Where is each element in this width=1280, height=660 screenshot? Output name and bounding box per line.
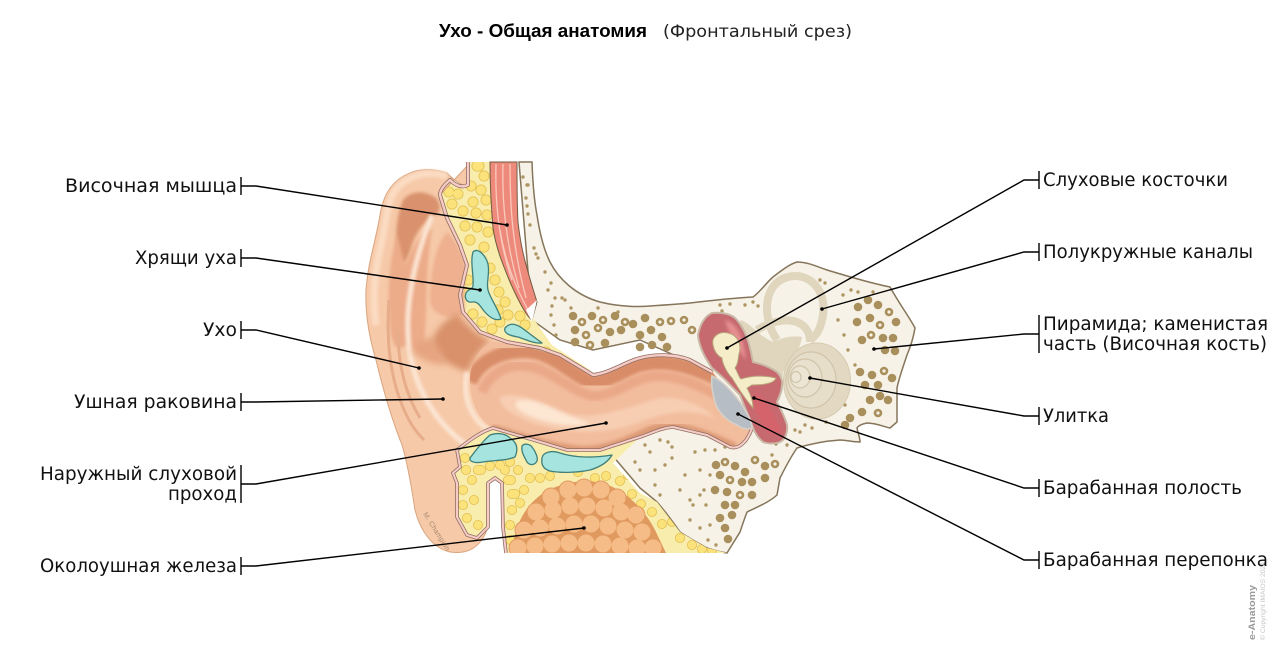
label: cochlea: Улитка <box>1043 406 1109 427</box>
label: semicircular canals: Полукружные каналы <box>1043 242 1253 263</box>
ear cartilage <box>465 251 612 472</box>
label: ear <box>203 320 421 370</box>
label: auricle <box>74 392 445 413</box>
label: ear cartilage <box>135 248 482 292</box>
label: auditory ossicles <box>725 170 1228 350</box>
skin membrane lower <box>453 427 752 553</box>
label: auditory ossicles: Слуховые косточки <box>1043 170 1228 191</box>
fat lower <box>453 428 727 553</box>
label: ear cartilage: Хрящи уха <box>135 248 237 269</box>
label: parotid gland <box>40 526 586 577</box>
label: petrous part <box>872 314 1268 355</box>
label: external auditory canal <box>40 421 608 505</box>
label: parotid gland: Околоушная железа <box>40 556 237 577</box>
skin membrane upper <box>440 162 712 375</box>
label: semicircular canals <box>820 242 1253 311</box>
scapha and antihelix folds <box>396 192 440 263</box>
label: petrous part: часть (Височная кость) <box>1043 334 1267 355</box>
label: tympanic membrane <box>736 412 1268 571</box>
temporal muscle <box>490 162 537 320</box>
title <box>439 20 852 42</box>
inner ear: vestibule and semicircular canals <box>740 276 824 400</box>
watermark: © Copyright IMAIOS 2024 <box>1259 562 1267 640</box>
left labels <box>40 176 608 577</box>
ear anatomy illustration <box>366 162 915 553</box>
label: cochlea <box>808 376 1109 427</box>
concha <box>430 232 466 317</box>
label: tympanic cavity: Барабанная полость <box>1043 478 1242 499</box>
label: temporal muscle: Височная мышца <box>65 176 237 197</box>
cochlea <box>784 343 850 419</box>
label: temporal muscle <box>65 176 509 227</box>
helix <box>374 174 447 325</box>
label: external auditory canal: Наружный слуховой <box>40 464 237 485</box>
right labels <box>725 170 1268 571</box>
watermark: e-Anatomy <box>1247 585 1257 640</box>
parotid gland <box>512 481 666 553</box>
fat upper <box>440 162 593 372</box>
label: auricle: Ушная раковина <box>74 392 237 413</box>
tympanic membrane <box>712 376 752 429</box>
watermark <box>1247 562 1267 640</box>
tympanic cavity <box>698 313 787 444</box>
title: Ухо - Общая анатомия <box>439 20 647 41</box>
label: tympanic membrane: Барабанная перепонка <box>1043 550 1268 571</box>
auditory ossicles <box>713 333 776 408</box>
bone pores <box>523 177 896 545</box>
label: tympanic cavity <box>752 396 1242 499</box>
temporal bone <box>519 162 915 553</box>
title: (Фронтальный срез) <box>663 22 852 42</box>
auricle <box>366 166 752 553</box>
artist signature: M. Champion <box>421 511 451 552</box>
label: external auditory canal: проход <box>168 484 237 505</box>
external auditory canal <box>470 342 750 448</box>
label: ear: Ухо <box>203 320 237 341</box>
label: petrous part: Пирамида; каменистая <box>1043 314 1268 335</box>
